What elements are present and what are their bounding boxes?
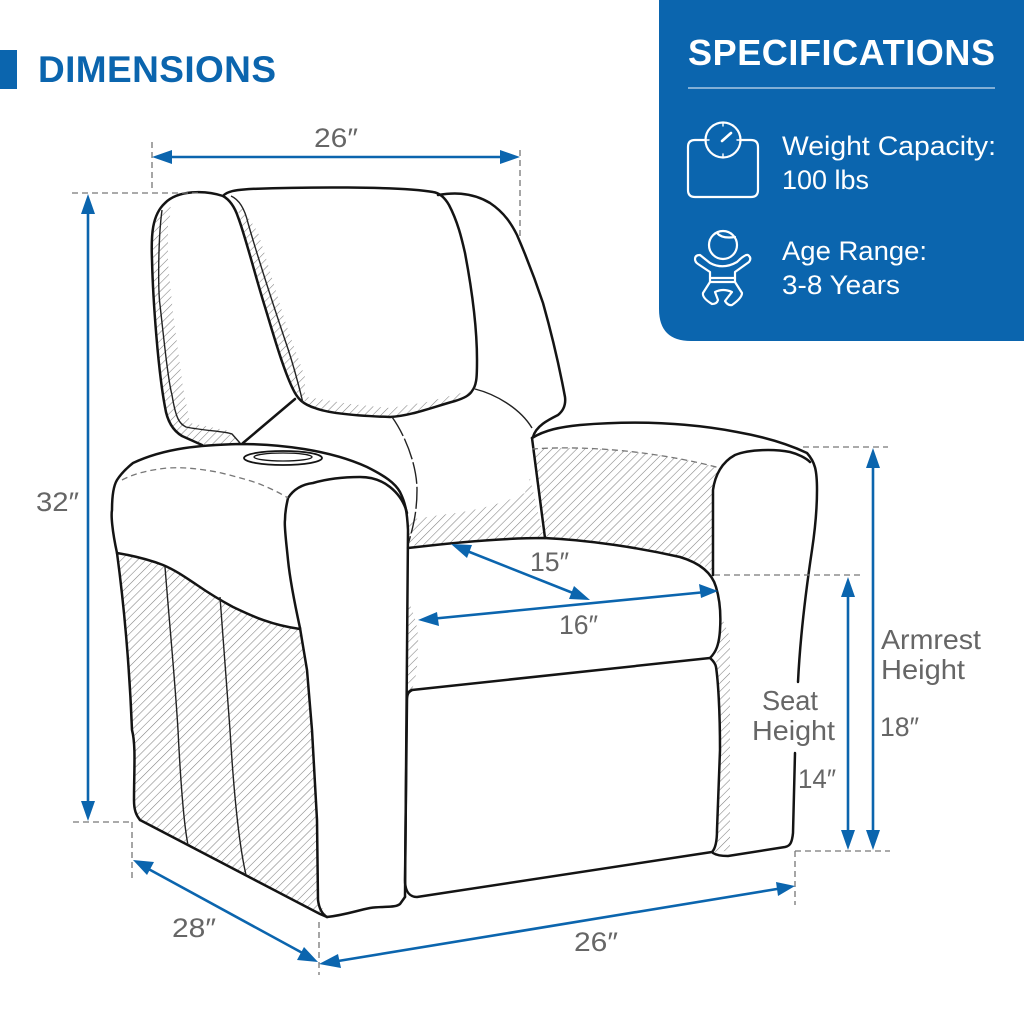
footrest bbox=[405, 658, 720, 897]
dimension: armrest height 18 bbox=[866, 448, 981, 850]
dimension: seat width 16: 16″ bbox=[559, 610, 598, 640]
hatch: left wing bbox=[152, 202, 241, 445]
hatch: right lower strip bbox=[715, 613, 730, 853]
left arm front bbox=[285, 477, 407, 628]
dimension: depth 28 bbox=[133, 860, 318, 962]
guide lines bbox=[72, 142, 890, 975]
dimension: armrest height 18: Armrest bbox=[881, 624, 981, 655]
hatch: seat left bbox=[407, 598, 418, 692]
hatch: left side panel bbox=[117, 553, 327, 917]
dimension: seat height 14: 14″ bbox=[798, 764, 836, 794]
panel: specifications: 100 lbs bbox=[782, 165, 869, 195]
right wing outline bbox=[438, 193, 565, 437]
dimension: seat width 16 bbox=[418, 584, 718, 640]
panel heading: SPECIFICATIONS bbox=[688, 32, 995, 73]
dimension: seat height 14: Height bbox=[752, 715, 835, 746]
panel: specifications bbox=[659, 0, 1024, 341]
dimension: overall width 26: 26″ bbox=[314, 123, 358, 153]
dimension: front width 26: 26″ bbox=[574, 927, 618, 957]
dimension: depth 28: 28″ bbox=[172, 913, 216, 943]
right arm outline bbox=[532, 423, 817, 682]
hatch: headrest bottom bbox=[303, 391, 472, 417]
right arm front bbox=[713, 450, 810, 575]
seat cushion bbox=[407, 538, 720, 693]
left wing outline bbox=[152, 192, 223, 445]
dimension: armrest height 18: Height bbox=[881, 654, 965, 685]
icon: scale bbox=[688, 122, 758, 197]
dimension: height 32 bbox=[36, 194, 95, 821]
dimension: overall width 26 bbox=[152, 123, 520, 164]
left arm bbox=[112, 444, 408, 897]
illustration: recliner chair bbox=[112, 187, 817, 917]
dimension: front width 26 bbox=[319, 882, 795, 968]
text: age range: Age Range: bbox=[782, 236, 927, 266]
dimension: seat depth 15: 15″ bbox=[530, 547, 569, 577]
hatch: right arm inner bbox=[532, 448, 720, 573]
dimension: seat height 14 bbox=[752, 577, 855, 850]
back center seams bbox=[243, 399, 295, 443]
panel: specifications: 3-8 Years bbox=[782, 270, 900, 300]
hatch: back lower bbox=[408, 478, 544, 546]
icon: baby bbox=[695, 231, 750, 305]
dimension: height 32: 32″ bbox=[36, 487, 79, 517]
dimension: seat depth 15 bbox=[451, 544, 590, 600]
hatch: headrest left edge bbox=[238, 205, 305, 400]
dimension: seat height 14: Seat bbox=[762, 685, 818, 716]
dimension: armrest height 18: 18″ bbox=[880, 712, 919, 742]
headrest cushion bbox=[223, 187, 477, 417]
heading: dimensions: DIMENSIONS bbox=[38, 49, 276, 90]
left panel wave bbox=[117, 553, 300, 629]
cup holder bbox=[244, 451, 322, 465]
text: weight capacity: Weight Capacity: bbox=[782, 131, 996, 161]
